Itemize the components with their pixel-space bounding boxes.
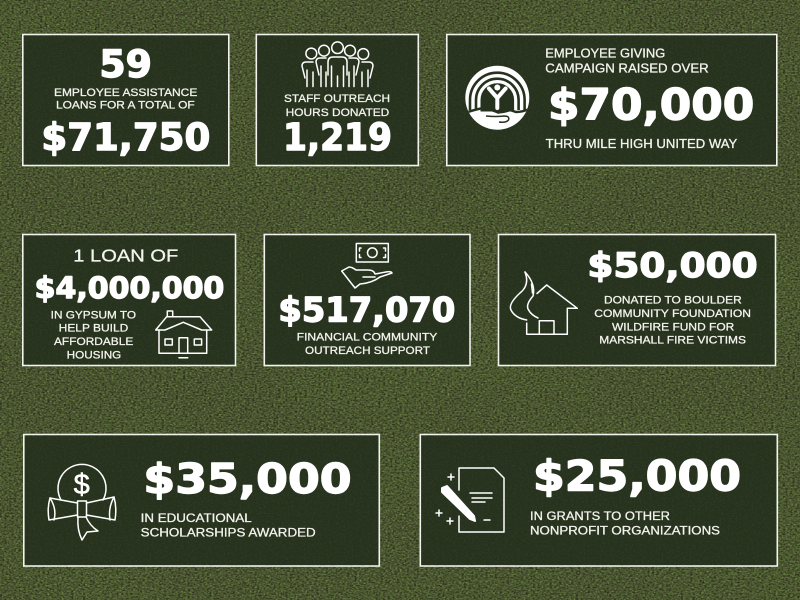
stat: $25,000: $25,000 — [533, 452, 741, 501]
icon: banknote over open hand — [342, 244, 392, 288]
stat: 1,219: 1,219 — [283, 116, 392, 159]
icon: united way hand and person — [462, 66, 533, 130]
text: donated to boulder community foundation: WILDFIRE FUND FOR — [612, 321, 734, 333]
icon: document and pen with sparkles — [436, 468, 504, 532]
stat: $71,750: $71,750 — [41, 116, 210, 159]
stat: $50,000: $50,000 — [587, 246, 758, 286]
text: in gypsum to help build affordable housing: HOUSING — [67, 349, 121, 361]
panel: employee assistance loans — [23, 34, 229, 166]
stat: 59: 59 — [99, 43, 152, 86]
panel: gypsum housing loan — [23, 234, 235, 366]
stat: $35,000: $35,000 — [143, 455, 352, 503]
icon: coin and diploma scroll — [48, 464, 116, 540]
icon: house — [156, 311, 212, 358]
stat: $517,070: $517,070 — [278, 290, 455, 329]
text: employee assistance loans: EMPLOYEE ASSISTANCE — [54, 87, 197, 99]
text: staff outreach hours donated: STAFF OUTREACH — [284, 93, 390, 105]
panel: employee giving campaign — [447, 34, 777, 166]
text: financial community outreach support: OUTREACH SUPPORT — [305, 345, 430, 357]
panel: wildfire fund donation — [498, 234, 776, 366]
text: financial community outreach support — [297, 332, 438, 357]
icon: group of people — [302, 42, 373, 86]
text: in gypsum to help build affordable housing — [51, 310, 136, 361]
panel: educational scholarships — [24, 434, 379, 566]
text: in grants to other nonprofit organizations — [530, 509, 720, 537]
text: financial community outreach support: FINANCIAL COMMUNITY — [297, 332, 438, 344]
text: in educational scholarships awarded: SCHOLARSHIPS AWARDED — [141, 526, 316, 540]
icon: house on fire — [510, 272, 577, 334]
text: staff outreach hours donated — [284, 93, 390, 119]
text: in gypsum to help build affordable housing: IN GYPSUM TO — [51, 310, 136, 322]
panel: nonprofit grants — [420, 434, 777, 566]
heading: 1 loan of: 1 LOAN OF — [73, 246, 178, 266]
text: donated to boulder community foundation — [594, 295, 751, 347]
text: employee assistance loans — [54, 87, 197, 112]
text: donated to boulder community foundation: COMMUNITY FOUNDATION — [594, 308, 751, 320]
text: staff outreach hours donated: HOURS DONATED — [286, 107, 389, 119]
text: in gypsum to help build affordable housing: AFFORDABLE — [54, 336, 133, 348]
panel: staff outreach hours — [256, 34, 418, 166]
text: employee assistance loans: LOANS FOR A TOTAL OF — [56, 100, 195, 112]
text: in educational scholarships awarded: IN EDUCATIONAL — [141, 511, 252, 525]
text: in grants to other nonprofit organizations: NONPROFIT ORGANIZATIONS — [530, 523, 720, 537]
stat: $4,000,000: $4,000,000 — [35, 271, 224, 305]
icon: coin and diploma scroll: $ — [74, 469, 90, 501]
text: employee giving campaign raised over: CAMPAIGN RAISED OVER — [545, 62, 709, 76]
text: employee giving campaign raised over — [545, 47, 709, 76]
text: donated to boulder community foundation: MARSHALL FIRE VICTIMS — [599, 335, 746, 347]
stat: $70,000: $70,000 — [548, 82, 754, 130]
text: in gypsum to help build affordable housing: HELP BUILD — [59, 323, 128, 335]
panel: financial community outreach — [264, 234, 470, 366]
text: donated to boulder community foundation: DONATED TO BOULDER — [604, 295, 742, 307]
text: employee giving campaign raised over: EMPLOYEE GIVING — [545, 47, 665, 61]
text: in grants to other nonprofit organizations: IN GRANTS TO OTHER — [530, 509, 670, 523]
text: thru mile high united way: THRU MILE HIGH UNITED WAY — [546, 137, 738, 151]
text: in educational scholarships awarded — [141, 511, 316, 540]
